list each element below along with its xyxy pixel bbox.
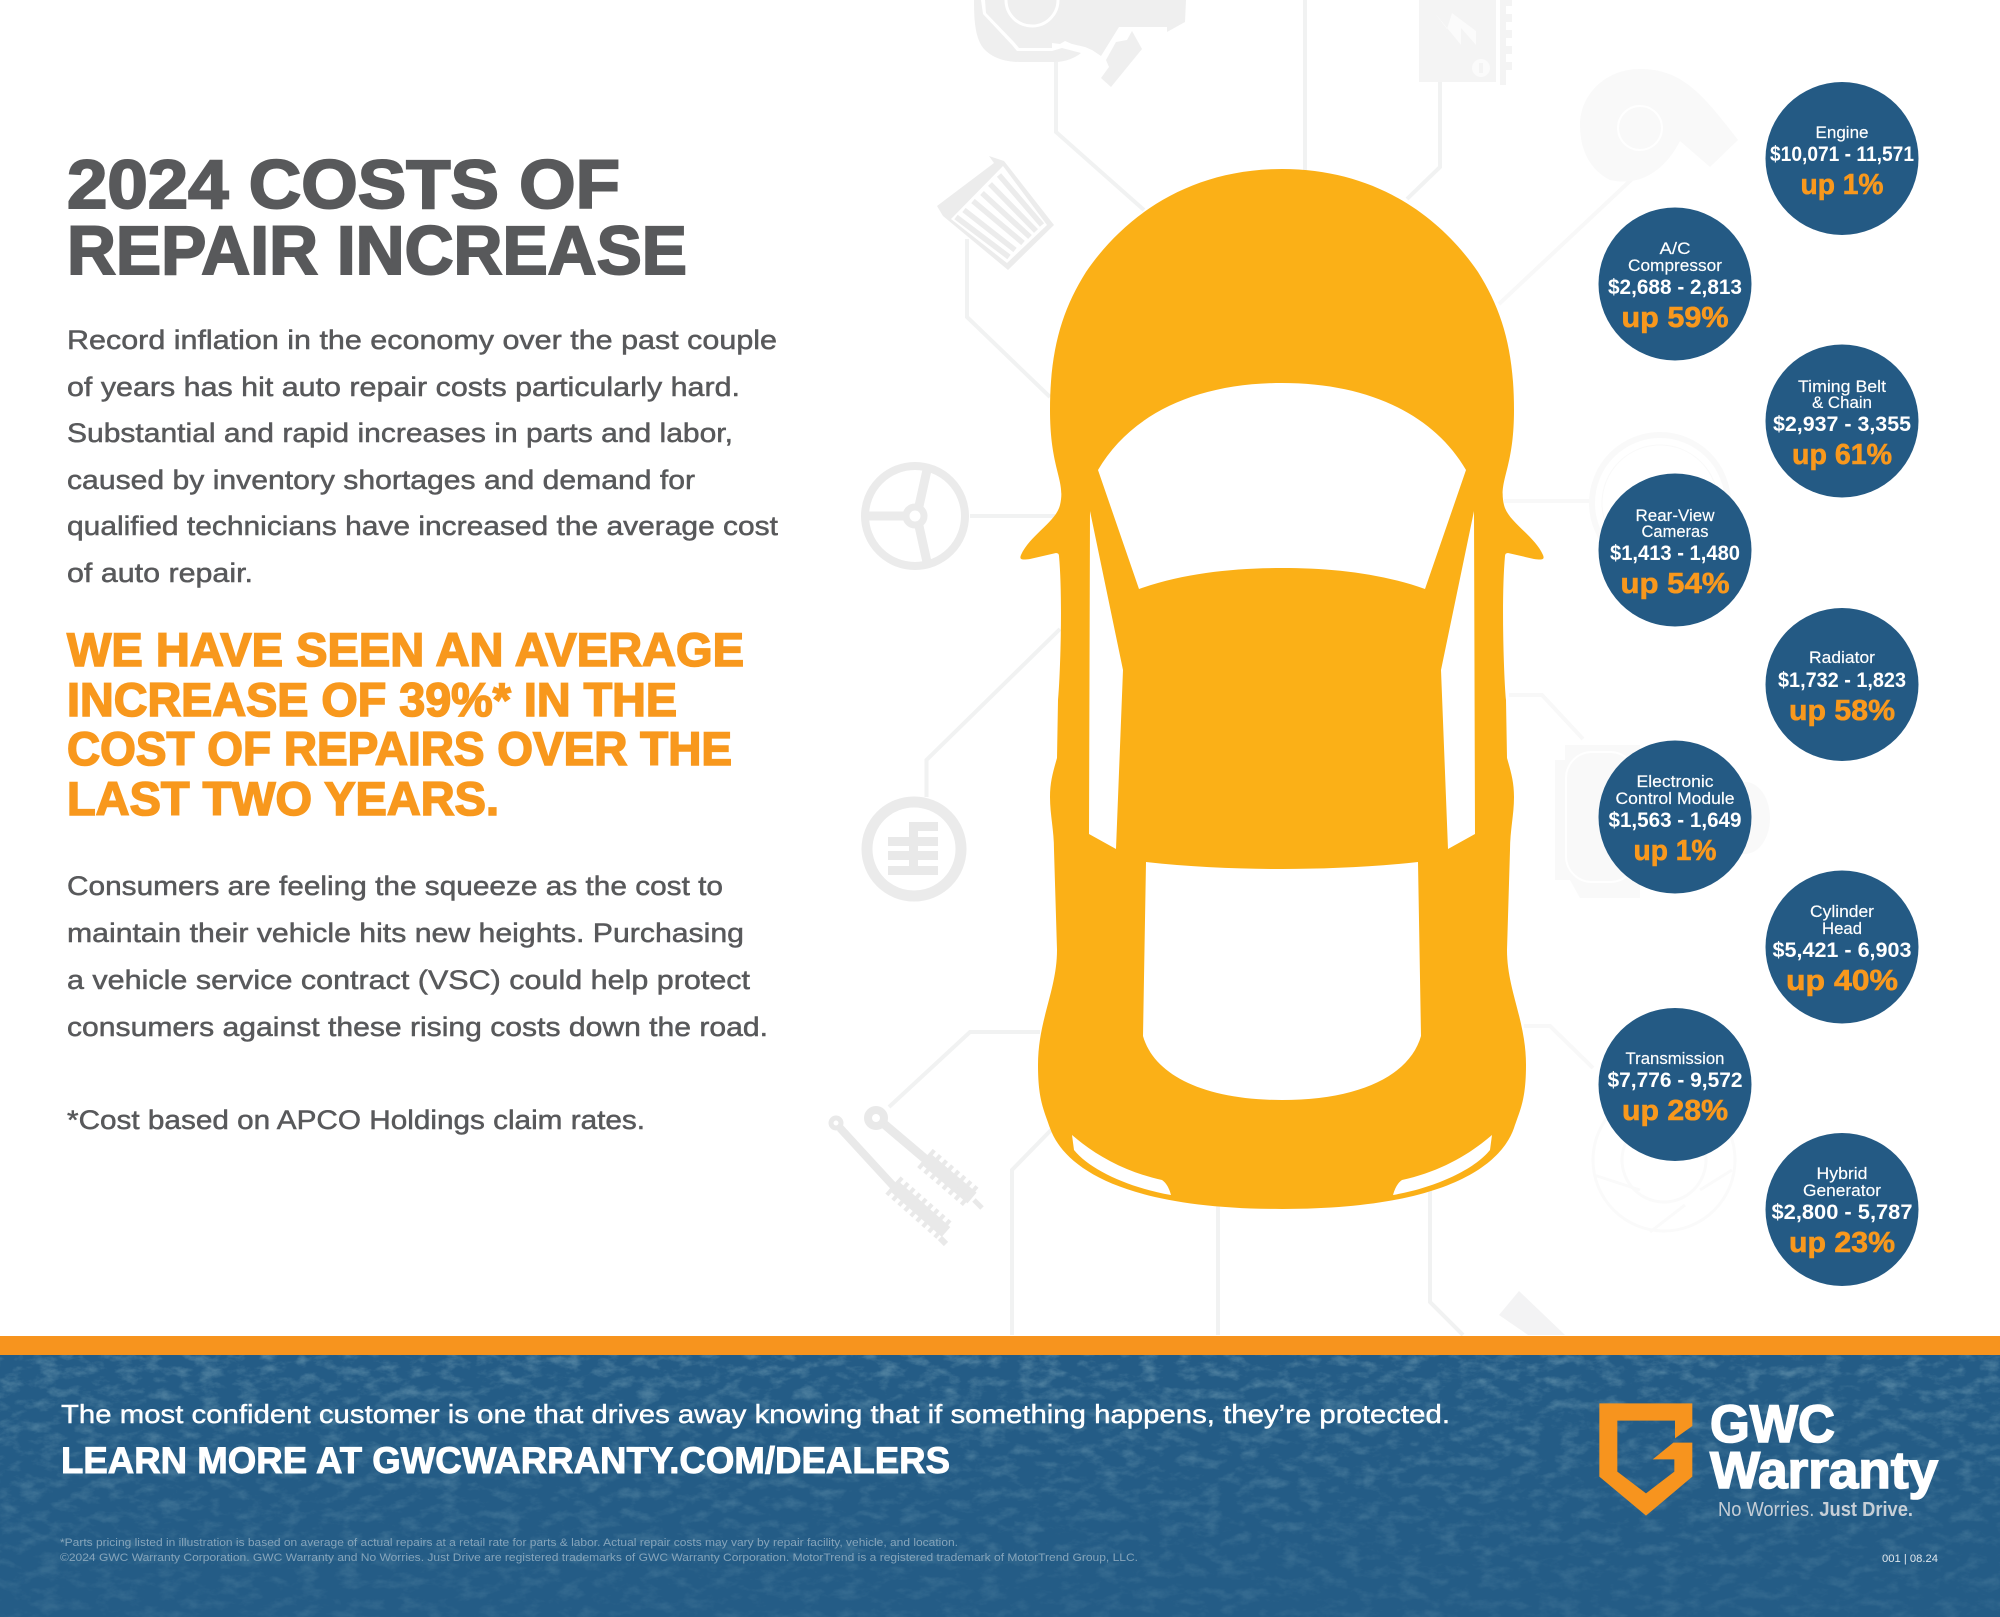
badge: A/C compressor: $2,688 - 2,813 bbox=[1608, 276, 1742, 299]
title bbox=[67, 146, 687, 289]
badge: transmission: Transmission bbox=[1626, 1049, 1724, 1068]
badge: cylinder head: Head bbox=[1822, 919, 1862, 938]
badge: cylinder head: $5,421 - 6,903 bbox=[1772, 939, 1912, 962]
badge: timing belt bbox=[1766, 344, 1918, 498]
badge: timing belt: $2,937 - 3,355 bbox=[1773, 413, 1911, 436]
highlighted statement: WE HAVE SEEN AN AVERAGE bbox=[67, 623, 744, 676]
intro paragraph: of years has hit auto repair costs particularly hard. bbox=[67, 372, 740, 402]
logo wordmark bbox=[1710, 1395, 1938, 1500]
badge: hybrid generator: up 23% bbox=[1789, 1227, 1895, 1259]
logo slogan: No Worries. Just Drive. bbox=[1718, 1499, 1913, 1521]
icon: gauge bbox=[1592, 435, 1728, 571]
icon: radiator bbox=[937, 156, 1054, 270]
footer call to action: LEARN MORE AT GWCWARRANTY.COM/DEALERS bbox=[61, 1440, 950, 1481]
badge: cylinder head bbox=[1766, 870, 1918, 1024]
badge: A/C compressor: up 59% bbox=[1622, 302, 1729, 334]
footer legal text: *Parts pricing listed in illustration is based on average of actual repairs at a retail rate for parts & labor. Actual repair costs may vary by repair facility, vehicle, and location. bbox=[60, 1537, 958, 1549]
second paragraph: Consumers are feeling the squeeze as the cost to bbox=[67, 871, 723, 901]
icon: shock absorbers bbox=[831, 1110, 982, 1244]
icon: control unit bbox=[1555, 745, 1770, 898]
badge: transmission bbox=[1598, 1008, 1752, 1161]
badge: engine bbox=[1766, 82, 1918, 235]
badge: electronic control module bbox=[1598, 740, 1752, 894]
logo: GWC shield bbox=[1599, 1403, 1692, 1516]
second paragraph bbox=[67, 871, 768, 1042]
title: 2024 COSTS OF bbox=[67, 146, 620, 223]
icon: brake disc bbox=[1593, 1089, 1735, 1232]
side windows bbox=[1089, 511, 1475, 849]
badge: cylinder head: up 40% bbox=[1786, 965, 1898, 997]
intro paragraph: Record inflation in the economy over the past couple bbox=[67, 325, 777, 355]
intro paragraph bbox=[67, 325, 779, 588]
second paragraph: consumers against these rising costs down the road. bbox=[67, 1012, 768, 1042]
badge: engine: $10,071 - 11,571 bbox=[1770, 143, 1914, 166]
badge: A/C compressor: Compressor bbox=[1628, 256, 1722, 275]
headlights bbox=[1072, 1135, 1492, 1195]
footnote: *Cost based on APCO Holdings claim rates. bbox=[67, 1105, 645, 1135]
icon: steering wheel bbox=[865, 466, 965, 566]
second paragraph: maintain their vehicle hits new heights. Purchasing bbox=[67, 918, 744, 948]
badge: timing belt: & Chain bbox=[1812, 393, 1872, 412]
badge: A/C compressor: A/C bbox=[1660, 239, 1690, 258]
second paragraph: a vehicle service contract (VSC) could help protect bbox=[67, 965, 751, 995]
icon: fuse box bbox=[1419, 0, 1512, 85]
badge: radiator bbox=[1766, 608, 1918, 761]
footer tagline: The most confident customer is one that drives away knowing that if something happens, they’re protected. bbox=[61, 1399, 1450, 1429]
document code: 001 | 08.24 bbox=[1882, 1553, 1938, 1565]
footer legal text: ©2024 GWC Warranty Corporation. GWC Warranty and No Worries. Just Drive are registered trademarks of GWC Warranty Corporation. MotorTrend is a registered trademark of MotorTrend Group, LLC. bbox=[60, 1552, 1138, 1564]
badge: electronic control module: $1,563 - 1,649 bbox=[1608, 809, 1742, 832]
icon: gear shifter bbox=[867, 802, 961, 896]
badge: timing belt: Timing Belt bbox=[1798, 377, 1886, 396]
badge: hybrid generator: $2,800 - 5,787 bbox=[1772, 1201, 1912, 1224]
car illustration bbox=[1020, 169, 1544, 1209]
badge: hybrid generator: Hybrid bbox=[1816, 1164, 1868, 1183]
icon: engine bbox=[974, 0, 1186, 87]
logo wordmark: GWC bbox=[1710, 1395, 1835, 1454]
title: REPAIR INCREASE bbox=[67, 212, 687, 289]
intro paragraph: of auto repair. bbox=[67, 558, 253, 588]
badge: cylinder head: Cylinder bbox=[1810, 902, 1874, 921]
highlighted statement: LAST TWO YEARS. bbox=[67, 772, 499, 825]
footer band bbox=[0, 1336, 2000, 1617]
badge: radiator: $1,732 - 1,823 bbox=[1778, 669, 1906, 692]
badge: radiator: up 58% bbox=[1789, 695, 1895, 727]
background circuit lines bbox=[889, 0, 1632, 1335]
badge: hybrid generator bbox=[1766, 1133, 1918, 1286]
badge: transmission: $7,776 - 9,572 bbox=[1608, 1069, 1742, 1092]
badge: rear-view cameras: up 54% bbox=[1620, 568, 1730, 600]
highlighted statement: COST OF REPAIRS OVER THE bbox=[67, 722, 732, 775]
badge: A/C compressor bbox=[1598, 208, 1752, 360]
badge: rear-view cameras: Cameras bbox=[1642, 522, 1708, 541]
highlighted statement: INCREASE OF 39%* IN THE bbox=[67, 673, 677, 726]
badge: hybrid generator: Generator bbox=[1803, 1181, 1881, 1200]
badge: rear-view cameras bbox=[1598, 474, 1752, 626]
badge: rear-view cameras: $1,413 - 1,480 bbox=[1610, 542, 1740, 565]
badge: electronic control module: Electronic bbox=[1636, 772, 1714, 791]
intro paragraph: qualified technicians have increased the average cost bbox=[67, 511, 779, 541]
intro paragraph: caused by inventory shortages and demand for bbox=[67, 465, 695, 495]
badge: transmission: up 28% bbox=[1622, 1095, 1728, 1127]
highlighted statement bbox=[67, 623, 744, 825]
badge: engine: up 1% bbox=[1800, 169, 1884, 201]
footer legal text bbox=[60, 1537, 1138, 1564]
icon: turbocharger bbox=[1580, 69, 1738, 182]
badge: engine: Engine bbox=[1816, 123, 1868, 142]
windshield bbox=[1098, 383, 1466, 589]
badge: electronic control module: up 1% bbox=[1634, 835, 1717, 867]
icon: diagonal bracket bbox=[1499, 1291, 1565, 1335]
badge: radiator: Radiator bbox=[1809, 648, 1875, 667]
intro paragraph: Substantial and rapid increases in parts and labor, bbox=[67, 418, 733, 448]
badge: rear-view cameras: Rear-View bbox=[1636, 506, 1715, 525]
rear window bbox=[1143, 862, 1421, 1100]
car body bbox=[1020, 169, 1544, 1209]
badge: timing belt: up 61% bbox=[1792, 439, 1892, 471]
logo wordmark: Warranty bbox=[1710, 1442, 1938, 1500]
badge: electronic control module: Control Module bbox=[1616, 789, 1734, 808]
